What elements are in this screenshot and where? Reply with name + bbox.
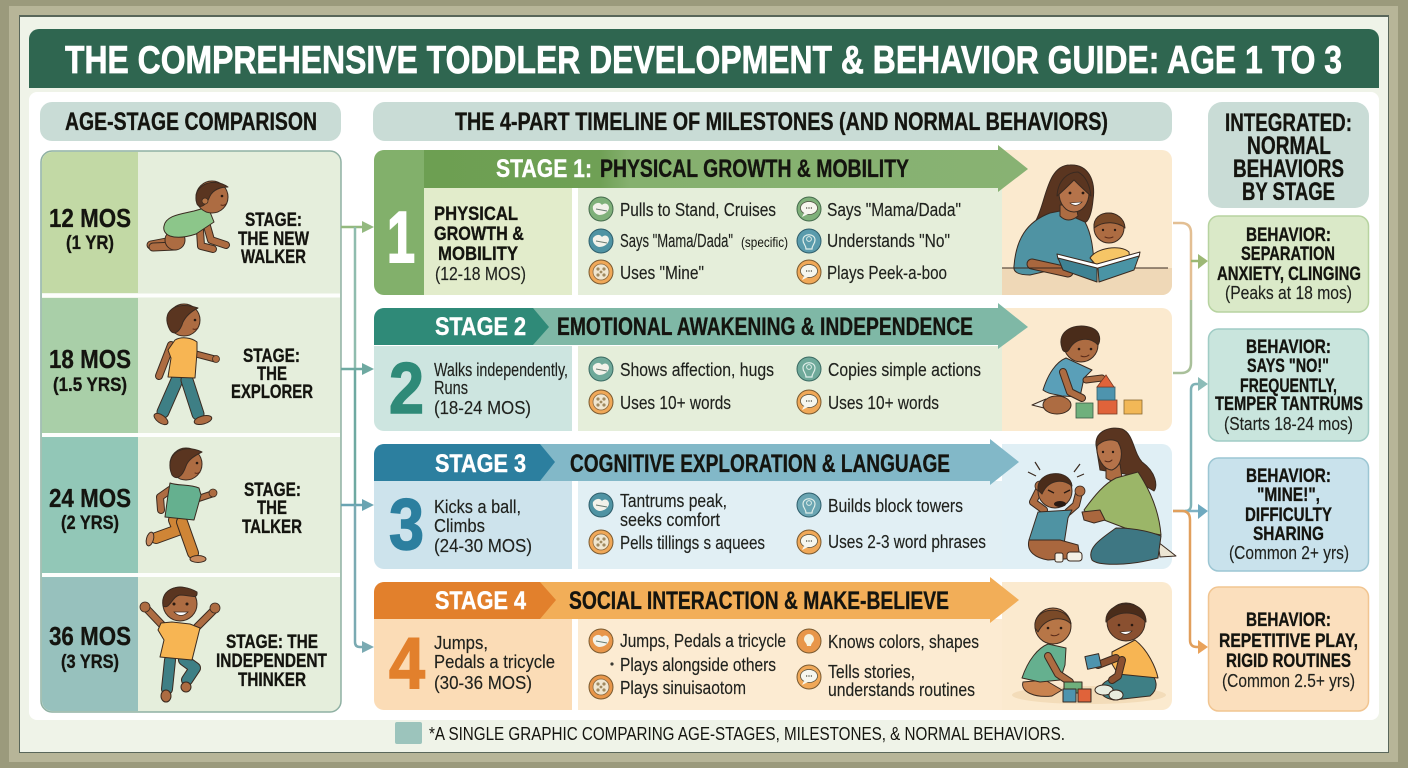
stage 4 milestones: Knows colors, shapes — [828, 632, 979, 652]
heading: timeline — [373, 102, 1172, 141]
illustration: mother comforting child in tantrum — [1028, 428, 1176, 564]
row: 12 months: (1 YR) — [66, 233, 114, 254]
heading: integrated normal behaviors: BEHAVIORS — [1233, 155, 1344, 183]
card: separation anxiety: SEPARATION — [1241, 244, 1335, 265]
stage 1 summary: PHYSICAL — [434, 204, 518, 225]
card: repetitive play — [1208, 587, 1368, 711]
heading: integrated normal behaviors: BY STAGE — [1242, 178, 1335, 206]
stage 4 summary: Pedals a tricycle — [434, 652, 555, 672]
stage 1 summary: (12-18 MOS) — [435, 264, 526, 284]
stage 2 summary — [434, 360, 568, 418]
heading: integrated normal behaviors — [1208, 102, 1369, 208]
row: 36 months — [49, 587, 327, 702]
row: 36 months: THINKER — [238, 670, 306, 691]
stage 2 summary: Walks independently, — [434, 360, 568, 380]
row: 24 months: 24 MOS — [49, 483, 131, 513]
row: 36 months: (3 YRS) — [61, 652, 119, 673]
stage 2 milestones: Uses 10+ words — [828, 393, 939, 413]
stage 1 milestones: Uses "Mine" — [620, 263, 704, 283]
card: repetitive play: REPETITIVE PLAY, — [1219, 631, 1358, 652]
row: 18 months: 18 MOS — [49, 344, 131, 374]
stage 1 milestones — [589, 197, 961, 284]
stage 1 milestones: Pulls to Stand, Cruises — [620, 200, 776, 220]
footnote: *A SINGLE GRAPHIC COMPARING AGE-STAGES, MILESTONES, & NORMAL BEHAVIORS. — [429, 724, 1065, 744]
stage 3 milestones: Uses 2-3 word phrases — [828, 532, 986, 552]
stage 1 milestones: Says "Mama/Dada" — [827, 200, 961, 220]
icon: jumping toddler — [140, 587, 220, 702]
row: 24 months: THE — [257, 498, 287, 519]
card: says no and tantrums: SAYS "NO!" — [1247, 356, 1329, 377]
stage 4 milestones: Tells stories, — [828, 662, 915, 682]
stage 2 header arrow — [374, 303, 1028, 349]
arrow: stages to behaviors — [1173, 223, 1208, 654]
stage 1 header arrow: PHYSICAL GROWTH & MOBILITY — [600, 155, 909, 183]
row: 36 months: INDEPENDENT — [216, 651, 327, 672]
stage 3 milestones: Tantrums peak, — [620, 491, 727, 511]
stage 3 summary: (24-30 MOS) — [434, 536, 532, 556]
stage 3 header arrow — [374, 439, 1019, 485]
stage 4 summary: (30-36 MOS) — [434, 673, 532, 693]
stage 2 header arrow: STAGE 2 — [435, 313, 526, 341]
stage 1 summary: MOBILITY — [438, 244, 518, 265]
panel: stage 3 — [374, 428, 1176, 569]
stage 2 summary: Runs — [434, 378, 468, 398]
stage 4 header arrow — [374, 577, 1019, 623]
row: 12 months: WALKER — [241, 247, 306, 268]
illustration: two children playing with blocks — [1012, 603, 1166, 704]
panel: stage 1 — [374, 145, 1172, 295]
stage 3 header arrow: STAGE 3 — [435, 450, 526, 478]
stage 2 number: 2 — [389, 349, 424, 429]
row: 18 months — [49, 304, 313, 427]
stage 4 header arrow: STAGE 4 — [435, 587, 526, 615]
stage 3 milestones — [589, 491, 986, 554]
stage 1 header arrow — [424, 145, 1028, 192]
stage 2 summary: (18-24 MOS) — [434, 398, 531, 418]
icon: crawling baby — [151, 181, 228, 250]
stage 2 milestones: Shows affection, hugs — [620, 360, 774, 380]
stage 3 header arrow: COGNITIVE EXPLORATION & LANGUAGE — [570, 450, 950, 478]
stage 4 milestones: Plays sinuisaotom — [620, 678, 746, 698]
stage 1 summary — [434, 204, 526, 284]
stage 1 header arrow: STAGE 1: — [496, 155, 592, 183]
stage 4 milestones: Jumps, Pedals a tricycle — [620, 631, 786, 651]
row: 24 months: STAGE: — [244, 480, 301, 501]
stage 1 number: 1 — [387, 198, 415, 278]
card: says no and tantrums: (Starts 18-24 mos) — [1224, 414, 1353, 434]
stage 4 milestones — [589, 629, 979, 700]
row: 12 months — [49, 181, 309, 268]
heading: age-stage comparison: AGE-STAGE COMPARISON — [65, 108, 317, 136]
stage 3 summary: Climbs — [434, 516, 485, 536]
card: separation anxiety: ANXIETY, CLINGING — [1217, 264, 1361, 285]
heading: integrated normal behaviors: INTEGRATED: — [1225, 109, 1352, 137]
heading: timeline: THE 4-PART TIMELINE OF MILESTONES (AND NORMAL BEHAVIORS) — [455, 108, 1108, 136]
icon: running toddler — [145, 448, 217, 562]
row: 12 months: STAGE: — [245, 210, 302, 231]
stage 1 milestones: Understands "No" — [827, 231, 950, 251]
panel: age-stage comparison table — [41, 151, 341, 712]
card: repetitive play: RIGID ROUTINES — [1226, 651, 1351, 672]
card: mine and sharing: DIFFICULTY — [1245, 505, 1332, 526]
icon: walking toddler — [152, 304, 220, 427]
card: says no and tantrums: TEMPER TANTRUMS — [1215, 394, 1363, 415]
panel: stage 4 — [374, 577, 1172, 710]
illustration: child stacking blocks — [1032, 326, 1142, 418]
row: 24 months: TALKER — [242, 517, 302, 538]
row: 12 months: THE NEW — [238, 229, 309, 250]
card: says no and tantrums — [1208, 329, 1368, 441]
card: mine and sharing: (Common 2+ yrs) — [1229, 543, 1349, 563]
row: 18 months: THE — [257, 364, 287, 385]
stage 1 milestones: (specific) — [741, 234, 788, 250]
card: repetitive play: BEHAVIOR: — [1246, 610, 1331, 631]
illustration: mother reading with child — [1002, 165, 1168, 282]
arrow: age rows to stage cards — [341, 221, 374, 653]
card: mine and sharing: "MINE!", — [1257, 485, 1320, 506]
row: 18 months: (1.5 YRS) — [53, 375, 127, 396]
stage 3 summary: Kicks a ball, — [434, 497, 521, 517]
heading: age-stage comparison — [40, 102, 341, 141]
stage 2 milestones — [589, 357, 981, 414]
stage 4 milestones: Plays alongside others — [620, 655, 776, 675]
row: 36 months: STAGE: THE — [226, 632, 318, 653]
title banner — [29, 29, 1379, 88]
heading: integrated normal behaviors: NORMAL — [1247, 132, 1331, 160]
card: separation anxiety: BEHAVIOR: — [1246, 225, 1331, 246]
stage 2 milestones: Copies simple actions — [828, 360, 981, 380]
row: 12 months: 12 MOS — [49, 203, 131, 233]
stage 3 summary — [434, 497, 532, 556]
stage 2 milestones: Uses 10+ words — [620, 393, 731, 413]
card: repetitive play: (Common 2.5+ yrs) — [1222, 671, 1355, 691]
stage 3 milestones: Pells tillings s aquees — [620, 533, 765, 553]
stage 1 summary: GROWTH & — [434, 224, 524, 245]
row: 18 months: STAGE: — [243, 346, 300, 367]
card: says no and tantrums: BEHAVIOR: — [1246, 337, 1331, 358]
stage 4 header arrow: SOCIAL INTERACTION & MAKE-BELIEVE — [569, 587, 949, 615]
stage 3 number: 3 — [389, 485, 424, 565]
stage 4 number: 4 — [389, 624, 425, 704]
stage 3 milestones: Builds block towers — [828, 496, 963, 516]
row: 18 months: EXPLORER — [231, 382, 313, 403]
main white panel — [29, 92, 1379, 720]
card: mine and sharing: BEHAVIOR: — [1246, 466, 1331, 487]
panel: stage 2 — [374, 303, 1172, 431]
stage 3 milestones: seeks comfort — [620, 510, 720, 530]
card: says no and tantrums: FREQUENTLY, — [1240, 376, 1337, 397]
card: separation anxiety — [1208, 216, 1368, 312]
stage 4 summary — [434, 633, 555, 693]
stage 2 header arrow: EMOTIONAL AWAKENING & INDEPENDENCE — [557, 313, 973, 341]
row: 36 months: 36 MOS — [49, 621, 131, 651]
stage 4 milestones: understands routines — [828, 680, 975, 700]
row: 24 months — [49, 448, 302, 562]
card: mine and sharing — [1208, 458, 1368, 571]
card: separation anxiety: (Peaks at 18 mos) — [1225, 283, 1352, 303]
stage 1 milestones: Plays Peek-a-boo — [827, 263, 947, 283]
card: mine and sharing: SHARING — [1253, 524, 1324, 545]
stage 1 milestones: Says "Mama/Dada" — [620, 231, 733, 251]
row: 24 months: (2 YRS) — [61, 513, 119, 534]
stage 4 summary: Jumps, — [434, 633, 488, 653]
